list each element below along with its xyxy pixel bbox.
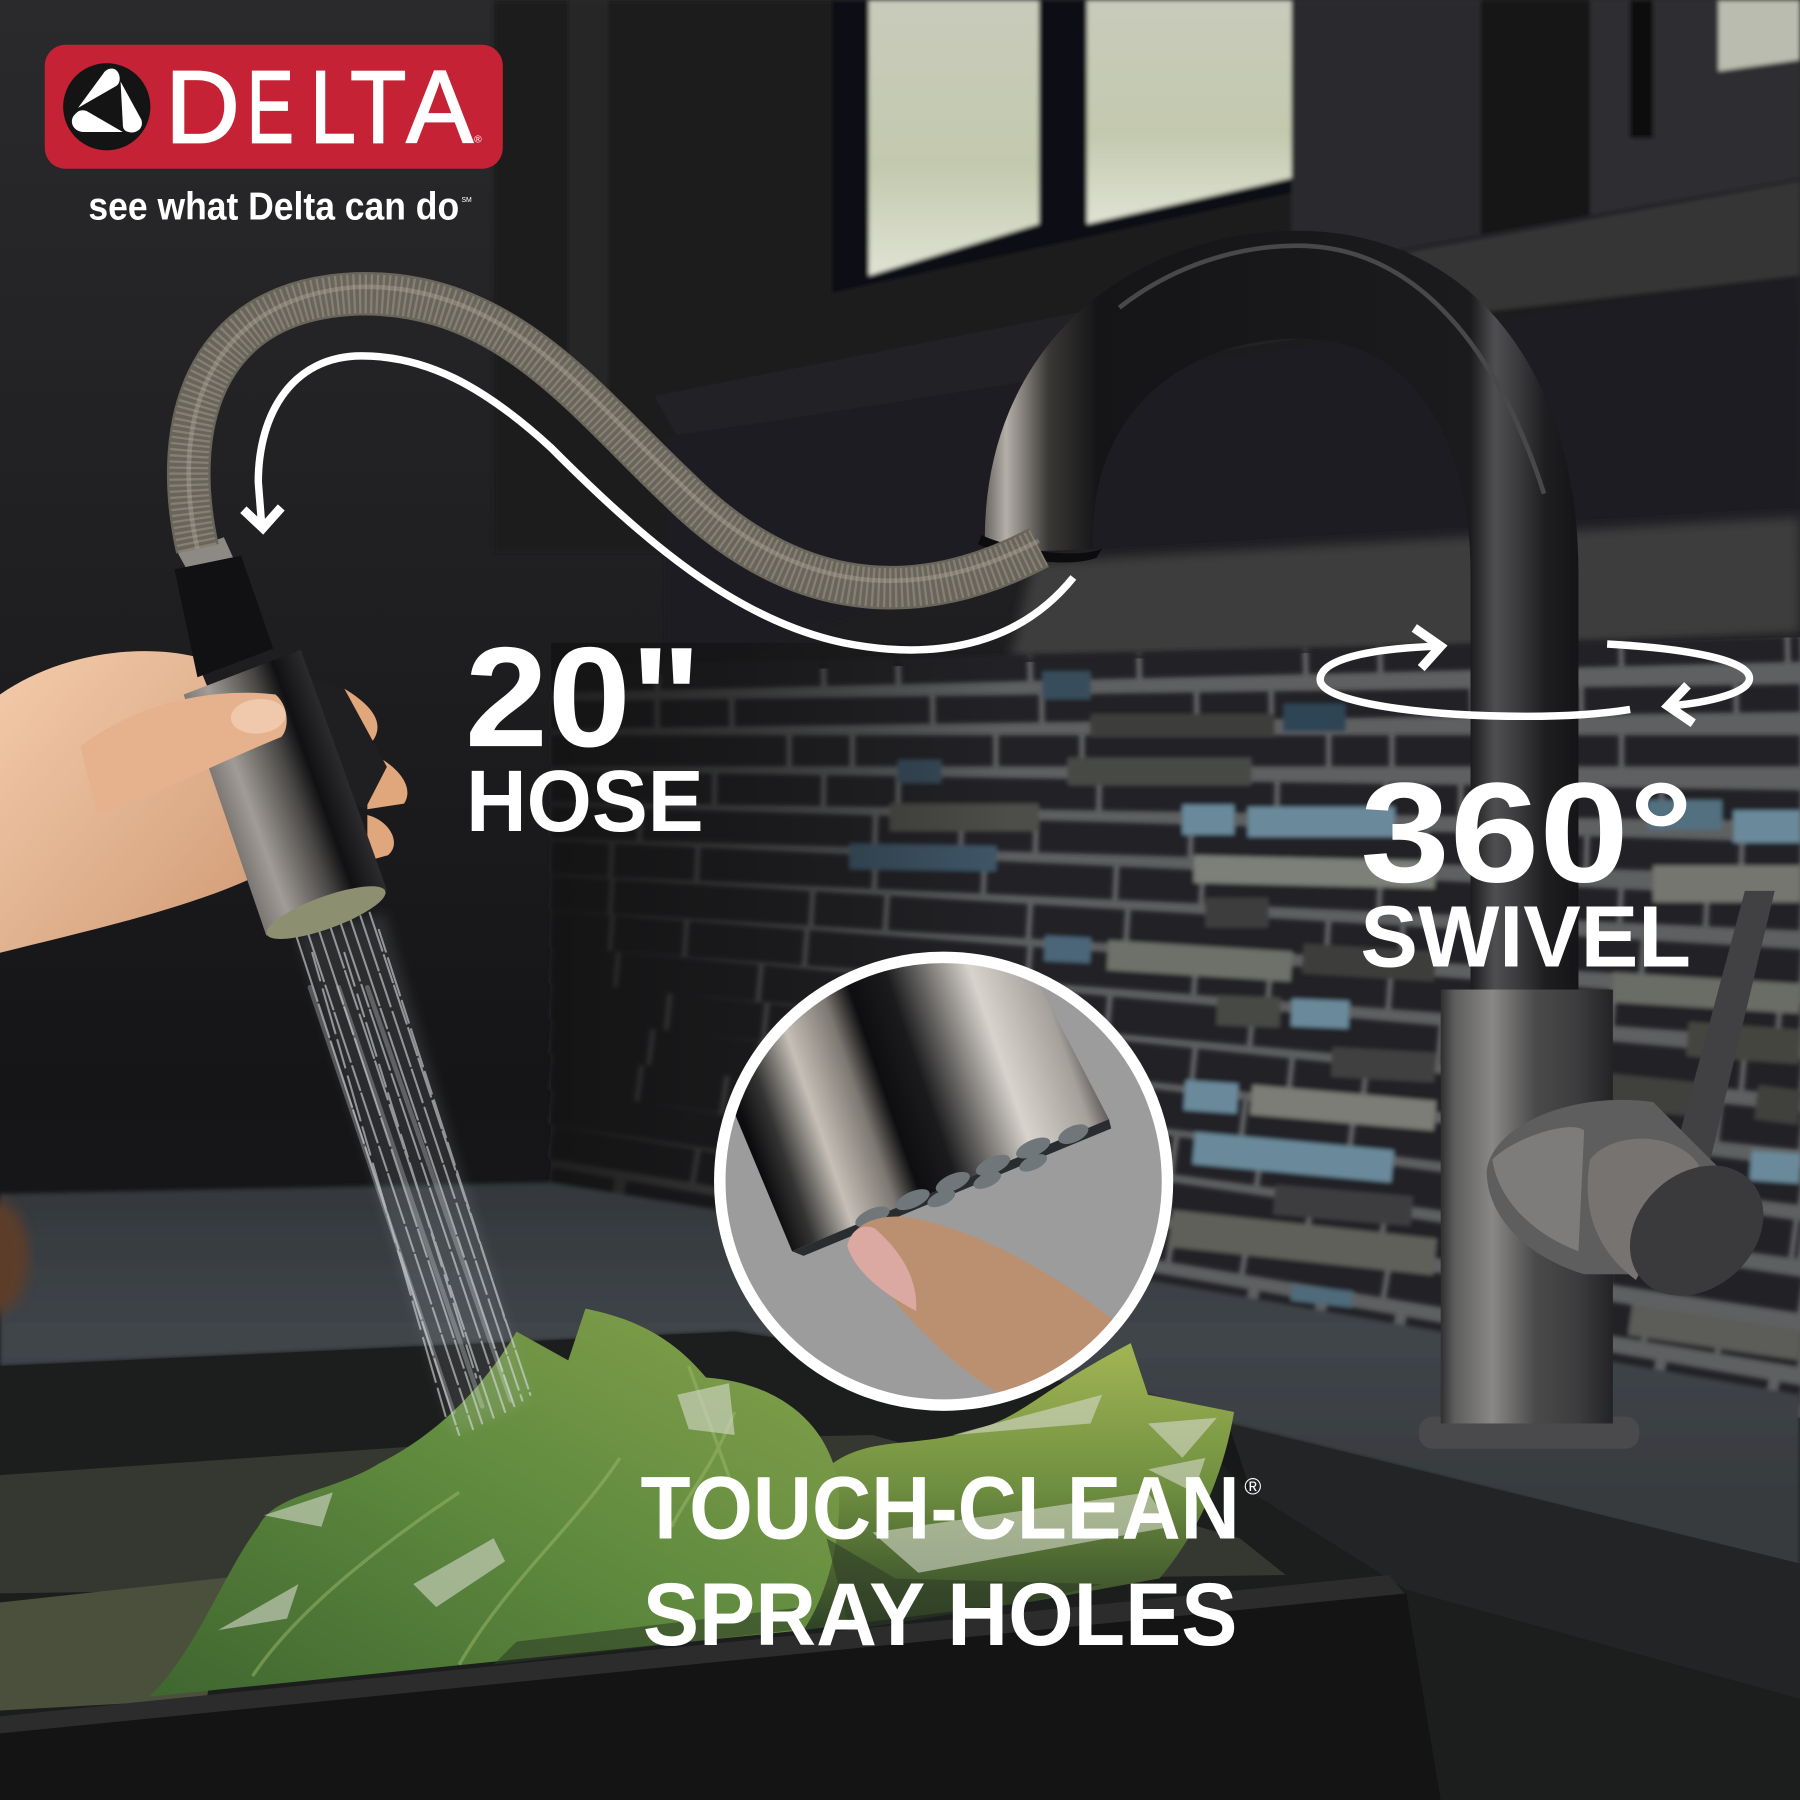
logo: triangle emblem xyxy=(63,63,150,150)
touch-clean label xyxy=(641,1457,1261,1664)
logo: wordmark: L xyxy=(310,48,356,164)
hose length arrow xyxy=(243,356,1073,650)
swivel rotation arrows xyxy=(1320,628,1749,723)
touch-clean label: SPRAY HOLES xyxy=(643,1564,1237,1664)
faucet base body xyxy=(1419,990,1639,1449)
background: blurred wood shelf band xyxy=(1010,517,1800,660)
inset: sprayer nozzle xyxy=(736,963,1109,1252)
logo: wordmark: T xyxy=(350,48,406,164)
logo: wordmark: E xyxy=(247,48,294,164)
logo: wordmark xyxy=(165,48,473,164)
Delta logo: ® xyxy=(474,134,482,145)
touch-clean label: TOUCH-CLEAN xyxy=(641,1457,1240,1557)
faucet lever handle xyxy=(1487,891,1790,1322)
touch-clean label: ® xyxy=(1244,1474,1261,1500)
faucet spout arch xyxy=(978,246,1544,999)
countertop: front edge xyxy=(1228,1423,1800,1699)
water spray xyxy=(296,913,530,1435)
sink xyxy=(0,1332,1800,1800)
hand: fingers behind sprayer xyxy=(0,651,407,953)
lettuce leaves xyxy=(149,1309,1234,1697)
braided hose xyxy=(189,287,1039,588)
logo: wordmark: D xyxy=(165,48,240,164)
swivel label xyxy=(1360,754,1693,986)
backsplash: mosaic tiles xyxy=(551,637,1800,1418)
faucet xyxy=(978,246,1790,1449)
spray holes inset circle xyxy=(719,895,1169,1406)
countertop xyxy=(0,1182,1800,1567)
logo tagline: SM xyxy=(461,197,472,204)
tiles: grey and brown mid-tone xyxy=(890,726,1800,1345)
far-left skin edge xyxy=(0,1200,29,1314)
logo tagline: see what Delta can do xyxy=(88,185,459,228)
logo: wordmark: A xyxy=(406,48,473,164)
hose label: HOSE xyxy=(466,753,704,850)
tiles: blue glass accents xyxy=(849,685,1800,1299)
swivel label: 360° xyxy=(1360,754,1693,913)
hose label xyxy=(465,618,704,850)
window panes xyxy=(869,0,1800,276)
hand: thumb over sprayer xyxy=(80,693,287,815)
swivel label: SWIVEL xyxy=(1360,889,1691,986)
sprayer head xyxy=(174,537,391,949)
hose label: 20" xyxy=(465,618,701,777)
background: upper cabinets and windows xyxy=(494,0,1800,677)
Delta logo xyxy=(45,45,503,169)
inset: fingertip xyxy=(847,1216,1114,1395)
inset: touch-clean spray nubs xyxy=(852,1120,1091,1232)
